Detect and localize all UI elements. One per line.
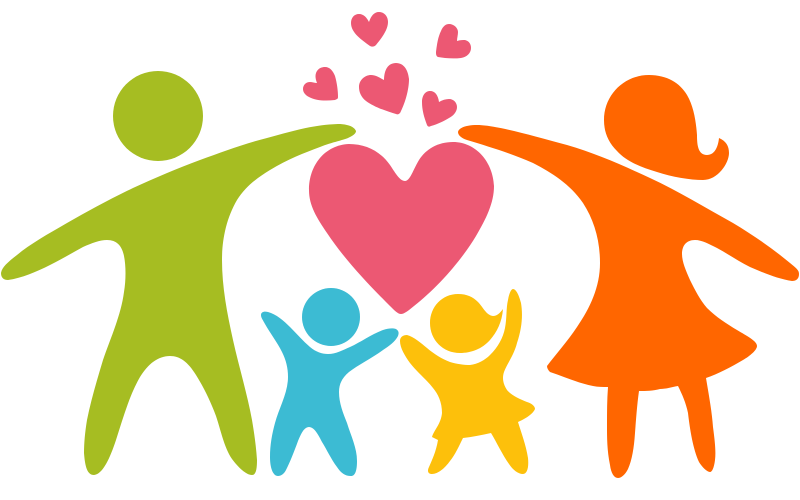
mother body and dress — [458, 125, 799, 478]
girl figure — [400, 289, 535, 474]
heart: left — [303, 67, 338, 101]
girl body and skirt — [400, 289, 535, 474]
father head — [113, 71, 203, 161]
big heart — [309, 142, 494, 314]
boy figure — [261, 288, 399, 476]
heart: top — [351, 12, 388, 47]
father body — [1, 124, 356, 475]
small hearts — [303, 12, 471, 127]
mother figure — [458, 75, 799, 478]
heart: upper right — [436, 24, 471, 58]
heart: center — [359, 63, 409, 114]
heart: right — [422, 91, 457, 127]
girl head with hair — [430, 294, 503, 353]
father figure — [1, 71, 356, 475]
boy body — [261, 312, 399, 476]
mother head with hair — [604, 75, 729, 180]
boy head — [302, 288, 360, 346]
